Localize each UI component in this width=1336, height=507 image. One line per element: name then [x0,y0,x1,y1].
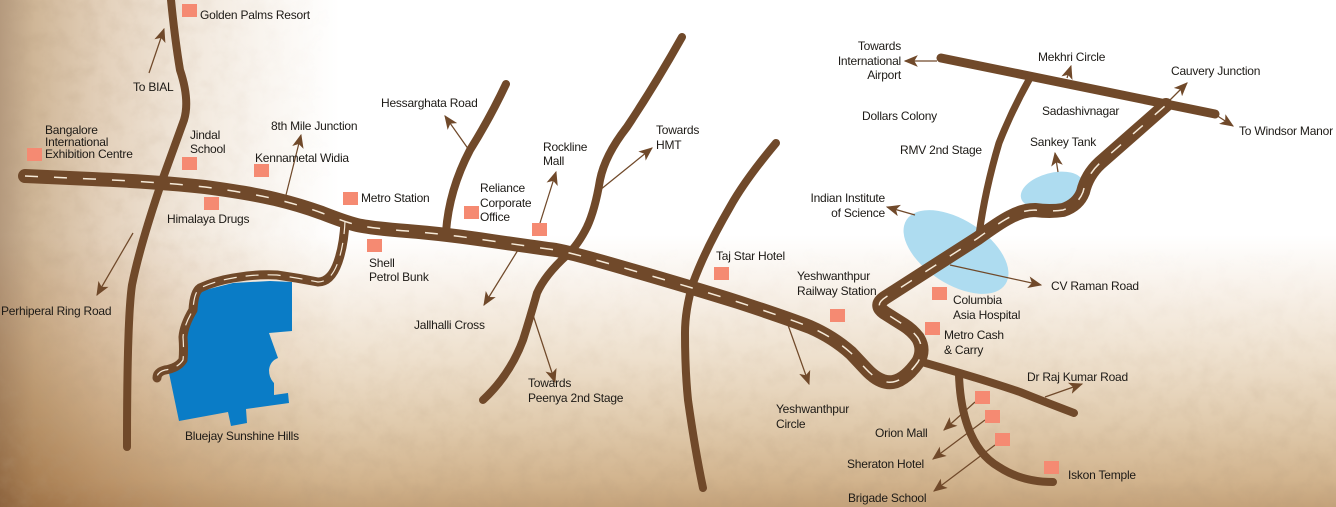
landmark markers [27,4,1059,474]
label: Sadashivnagar: Sadashivnagar [1042,104,1119,118]
arrow: Jallhalli Cross [484,250,518,305]
arrow: Towards International Airport [905,60,937,62]
lake: Sankey Tank [1017,165,1087,215]
label: Bangalore International Exhibition Centre: International [45,135,108,149]
label: Taj Star Hotel: Taj Star Hotel [716,249,785,263]
label: Bluejay Sunshine Hills: Bluejay Sunshine Hills [185,429,299,443]
label: Reliance Corporate Office: Office [480,210,510,224]
label: Metro Station: Metro Station [361,191,430,205]
label: To Windsor Manor: To Windsor Manor [1239,124,1333,138]
label: Yeshwanthpur Circle: Yeshwanthpur [776,402,849,416]
road: Iskon Temple [959,375,1053,482]
road: ring road [127,0,186,447]
arrow: 8th Mile Junction [286,135,301,195]
marker: Golden Palms Resort [182,4,197,17]
label: Yeshwanthpur Railway Station: Yeshwanthpur [797,269,870,283]
arrow: CV Raman Road [950,265,1041,285]
label: Jindal School: Jindal [190,128,220,142]
road markings: Bluejay access [157,221,345,378]
marker: Iskon Temple [1044,461,1059,474]
arrow: Sheraton Hotel [933,420,985,459]
marker: Taj Star Hotel [714,267,729,280]
label: Towards International Airport: International [838,54,901,68]
label: CV Raman Road: CV Raman Road [1051,279,1139,293]
marker: Sheraton Hotel [985,410,1000,423]
arrow: Rockline Mall [540,172,556,223]
road markings: main highway [25,105,1166,382]
lake: Indian Institute of Science [889,193,1023,311]
label: Himalaya Drugs: Himalaya Drugs [167,212,249,226]
marker: Bangalore International Exhibition Centre [27,148,42,161]
arrow: Towards HMT [600,148,652,190]
label: Dollars Colony: Dollars Colony [862,109,937,123]
marker: Yeshwanthpur Railway Station [830,309,845,322]
arrow: Cauvery Junction [1168,83,1187,102]
label: Bangalore International Exhibition Centre: Exhibition Centre [45,147,133,161]
label: Jindal School: School [190,142,225,156]
marker: Jindal School [182,157,197,170]
label: RMV 2nd Stage: RMV 2nd Stage [900,143,982,157]
marker: Metro Station [343,192,358,205]
label: Yeshwanthpur Railway Station: Railway Station [797,284,876,298]
road: Mekhri branch [979,78,1030,235]
label: Reliance Corporate Office: Corporate [480,196,532,210]
label: Mekhri Circle: Mekhri Circle [1038,50,1106,64]
arrow: Indian Institute of Science [887,207,915,215]
label: Towards International Airport: Airport [867,68,902,82]
arrow: Sankey Tank [1055,153,1058,172]
label: Orion Mall: Orion Mall [875,426,927,440]
label: To BIAL: To BIAL [133,80,174,94]
marker: Columbia Asia Hospital [932,287,947,300]
marker: Shell Petrol Bunk [367,239,382,252]
marker: Brigade School [995,433,1010,446]
label: Towards International Airport: Towards [858,39,901,53]
label: 8th Mile Junction: 8th Mile Junction [271,119,357,133]
label: Shell Petrol Bunk: Shell [369,256,395,270]
label: Towards HMT: Towards [656,123,699,137]
Bluejay Sunshine Hills plot [169,281,292,426]
road: HMT to Peenya [483,37,682,400]
arrow: Orion Mall [944,402,975,430]
arrow: Mekhri Circle [1067,66,1071,78]
label: Jallhalli Cross: Jallhalli Cross [414,318,485,332]
label: Cauvery Junction: Cauvery Junction [1171,64,1260,78]
label: Rockline Mall: Rockline [543,140,587,154]
label: Towards HMT: HMT [656,138,682,152]
label: Hessarghata Road: Hessarghata Road [381,96,478,110]
road: Hessarghata [446,84,506,232]
arrow: To Windsor Manor [1216,115,1233,126]
arrow: Brigade School [934,445,995,491]
marker: Himalaya Drugs [204,197,219,210]
road: Bluejay access [157,221,345,378]
road: Dr Raj Kumar [922,362,1074,413]
label: Perhiperal Ring Road: Perhiperal Ring Road [1,304,111,318]
label: Kennametal Widia: Kennametal Widia [255,151,349,165]
label: Dr Raj Kumar Road: Dr Raj Kumar Road [1027,370,1128,384]
marker: Orion Mall [975,391,990,404]
direction arrows [97,29,1233,491]
road: main highway [25,105,1166,382]
marker: Reliance Corporate Office [464,206,479,219]
label: Towards Peenya 2nd Stage: Peenya 2nd Stage [528,391,624,405]
label: Brigade School: Brigade School [848,491,926,505]
label: Yeshwanthpur Circle: Circle [776,417,806,431]
arrow: Dr Raj Kumar Road [1045,384,1082,397]
marker: Rockline Mall [532,223,547,236]
arrow: Hessarghata Road [445,116,469,150]
label: Towards Peenya 2nd Stage: Towards [528,376,571,390]
label: Metro Cash and Carry: Metro Cash [944,328,1004,342]
label: Rockline Mall: Mall [543,154,564,168]
label: Columbia Asia Hospital: Columbia [953,293,1002,307]
road: Taj Star Hotel crossing [685,143,776,488]
arrow: Yeshwanthpur Circle [788,325,809,384]
label: Indian Institute of Science: of Science [831,206,886,220]
label: Reliance Corporate Office: Reliance [480,181,525,195]
label: Columbia Asia Hospital: Asia Hospital [953,308,1020,322]
label: Shell Petrol Bunk: Petrol Bunk [369,270,430,284]
marker: Metro Cash and Carry [925,322,940,335]
arrow: Peripheral Ring Road [97,233,133,295]
label: Bangalore International Exhibition Centre: Bangalore [45,123,98,137]
label: Iskon Temple: Iskon Temple [1068,468,1136,482]
label: Metro Cash and Carry: & Carry [944,343,983,357]
arrow: To BIAL [149,29,164,73]
label: Sheraton Hotel: Sheraton Hotel [847,457,924,471]
road: top Mekhri [941,58,1215,114]
label: Indian Institute of Science: Indian Institute [810,191,885,205]
label: Sankey Tank: Sankey Tank [1030,135,1097,149]
marker: Kennametal Widia [254,164,269,177]
arrow: Towards Peenya [533,315,555,382]
label: Golden Palms Resort: Golden Palms Resort [200,8,311,22]
